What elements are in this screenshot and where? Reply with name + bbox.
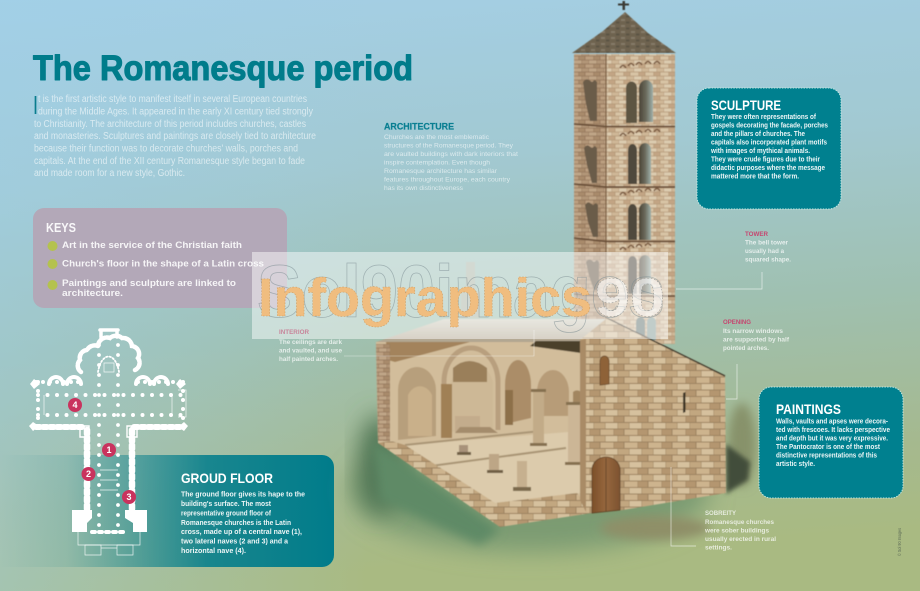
- columns: [457, 389, 581, 491]
- panel: paintings: The Pantocrator is one of the most: [776, 442, 880, 451]
- panel: keys: [33, 208, 287, 308]
- callout: interior: The ceilings are dark: [279, 339, 342, 346]
- panel: ground floor: [0, 455, 334, 567]
- marker 3: [122, 490, 136, 504]
- callout: sobreity: were sober buildings: [704, 528, 769, 534]
- panel: paintings: artistic style.: [776, 459, 815, 468]
- panel: paintings: [759, 387, 903, 498]
- callout: opening: [723, 319, 790, 399]
- architecture text block: Churches are the most emblematic: [384, 134, 490, 141]
- intro text block: because their function was to decorate churches' walls, porches and: [34, 144, 298, 154]
- intro text block: to Christianity. The architecture of this period includes churches, castles: [34, 119, 306, 130]
- window: [600, 356, 609, 385]
- architecture text block: structures of the Romanesque period. They: [384, 142, 514, 150]
- panel: ground floor: cross, made up of a central nave (1),: [181, 527, 302, 536]
- panel: ground floor: representative ground floor of: [181, 508, 271, 518]
- architecture text block: features throughout Europe, each country: [384, 176, 511, 184]
- panel: paintings: distinctive representations of this: [776, 450, 877, 460]
- architecture text block: ARCHITECTURE: [384, 122, 454, 132]
- panel: sculpture: capitals also incorporated plant motifs: [711, 138, 827, 146]
- panel: keys: Paintings and sculpture are linked to: [62, 278, 236, 289]
- watermark strip: 90: [595, 268, 665, 328]
- intro text block: during the Middle Ages. It appeared in the early XI century tied strongly: [38, 106, 313, 118]
- slit: [683, 392, 686, 413]
- panel: sculpture: gospels decorating the facade, porches: [711, 120, 828, 130]
- floor plan: latin cross: [29, 330, 188, 555]
- callout: opening: OPENING: [723, 319, 751, 326]
- intro text block: capitals. At the end of the XII century Romanesque style began to fade: [34, 156, 305, 167]
- callout: opening: pointed arches.: [723, 345, 769, 352]
- callout: sobreity: Romanesque churches: [705, 519, 774, 526]
- panel: keys: Church's floor in the shape of a Latin cross: [62, 258, 264, 270]
- arches: [398, 348, 581, 440]
- marker 2: [82, 467, 96, 481]
- callout: tower: The bell tower: [745, 240, 788, 246]
- image credit: © Sol 90 Images: [896, 527, 902, 556]
- panel: ground floor: Romanesque churches is the Latin: [181, 518, 291, 527]
- callout: tower: squared shape.: [745, 256, 791, 264]
- low front wall: [378, 441, 592, 527]
- intro text block: t is the first artistic style to manifest itself in several European countries: [38, 94, 307, 105]
- marker 4: [68, 398, 82, 412]
- panel: sculpture: didactic purposes where the message: [711, 163, 825, 172]
- illustration: church: [350, 1, 756, 552]
- callout: interior: [279, 329, 534, 363]
- nave roof: [376, 319, 607, 342]
- tower windows: [583, 79, 656, 340]
- intro text block: I: [33, 90, 38, 120]
- callout: tower: [676, 231, 791, 289]
- architecture text block: inspire contemplation. Even though: [384, 160, 490, 166]
- panel: sculpture: with images of mythical animals.: [710, 146, 810, 155]
- callout: tower: usually had a: [745, 248, 784, 255]
- architecture text block: has its own distinctiveness: [384, 185, 464, 192]
- callout: sobreity: SOBREITY: [705, 510, 737, 517]
- small distant tower behind strip: [461, 262, 480, 318]
- marker 1: 1: [106, 445, 112, 455]
- callout: tower: TOWER: [745, 231, 769, 238]
- panel: keys: KEYS: [46, 220, 76, 235]
- callout: interior: half painted arches.: [279, 356, 338, 363]
- gable wall: [580, 318, 726, 513]
- panel: sculpture: and the pillars of churches. The: [711, 129, 805, 138]
- panel: ground floor: GROUD FLOOR: [181, 470, 273, 486]
- panel: ground floor: The ground floor gives its hape to the: [181, 490, 305, 498]
- callout: sobreity: usually erected in rural: [705, 536, 776, 543]
- grass: [350, 403, 756, 552]
- interior back wall: [376, 342, 581, 507]
- floor: [405, 431, 581, 503]
- panel: ground floor: horizontal nave (4).: [181, 546, 246, 555]
- watermark strip: Infographics: [258, 268, 592, 328]
- panel: keys: architecture.: [62, 288, 123, 299]
- panel: sculpture: SCULPTURE: [711, 97, 781, 113]
- panel: sculpture: They were often representations of: [711, 112, 816, 121]
- watermark strip: Sol90images: [257, 250, 665, 333]
- door: [592, 457, 620, 513]
- panel: ground floor: two lateral naves (2 and 3) and a: [181, 536, 289, 546]
- intro text block: [33, 90, 316, 179]
- callout: opening: are supported by half: [723, 336, 790, 344]
- marker 1: [102, 443, 116, 457]
- panel: paintings: Walls, vaults and apses were decora-: [776, 416, 888, 426]
- bell tower: [572, 1, 676, 344]
- panel: sculpture: They were crude figures due to their: [711, 154, 820, 164]
- callout: sobreity: [671, 467, 776, 552]
- callout: sobreity: settings.: [705, 544, 732, 552]
- marker 3: 3: [126, 492, 132, 502]
- panel: paintings: ted with frescoes. It lacks perspective: [776, 425, 890, 434]
- callout: interior: INTERIOR: [279, 329, 310, 336]
- intro text block: and monasteries. Sculptures and paintings are closely tied to architecture: [34, 131, 316, 142]
- intro text block: and made room for a new style, Gothic.: [34, 168, 185, 179]
- callout: opening: Its narrow windows: [723, 328, 783, 335]
- panel: sculpture: [697, 88, 841, 209]
- architecture text block: are vaulted buildings with dark interiors that: [384, 151, 518, 158]
- panel: paintings: PAINTINGS: [776, 401, 841, 417]
- architecture text block: Romanesque architecture has similar: [384, 168, 498, 175]
- panel: paintings: and depth but it was very expressive.: [776, 434, 888, 442]
- panel: keys: Art in the service of the Christian faith: [62, 240, 242, 251]
- architecture text block: [384, 122, 518, 192]
- panel: sculpture: mattered more that the form.: [711, 172, 799, 180]
- panel: ground floor: building's surface. The most: [181, 499, 271, 508]
- title: The Romanesque period: [33, 49, 413, 88]
- marker 2: 2: [86, 469, 91, 479]
- callout: interior: and vaulted, and use: [279, 348, 342, 354]
- marker 4: 4: [72, 400, 78, 410]
